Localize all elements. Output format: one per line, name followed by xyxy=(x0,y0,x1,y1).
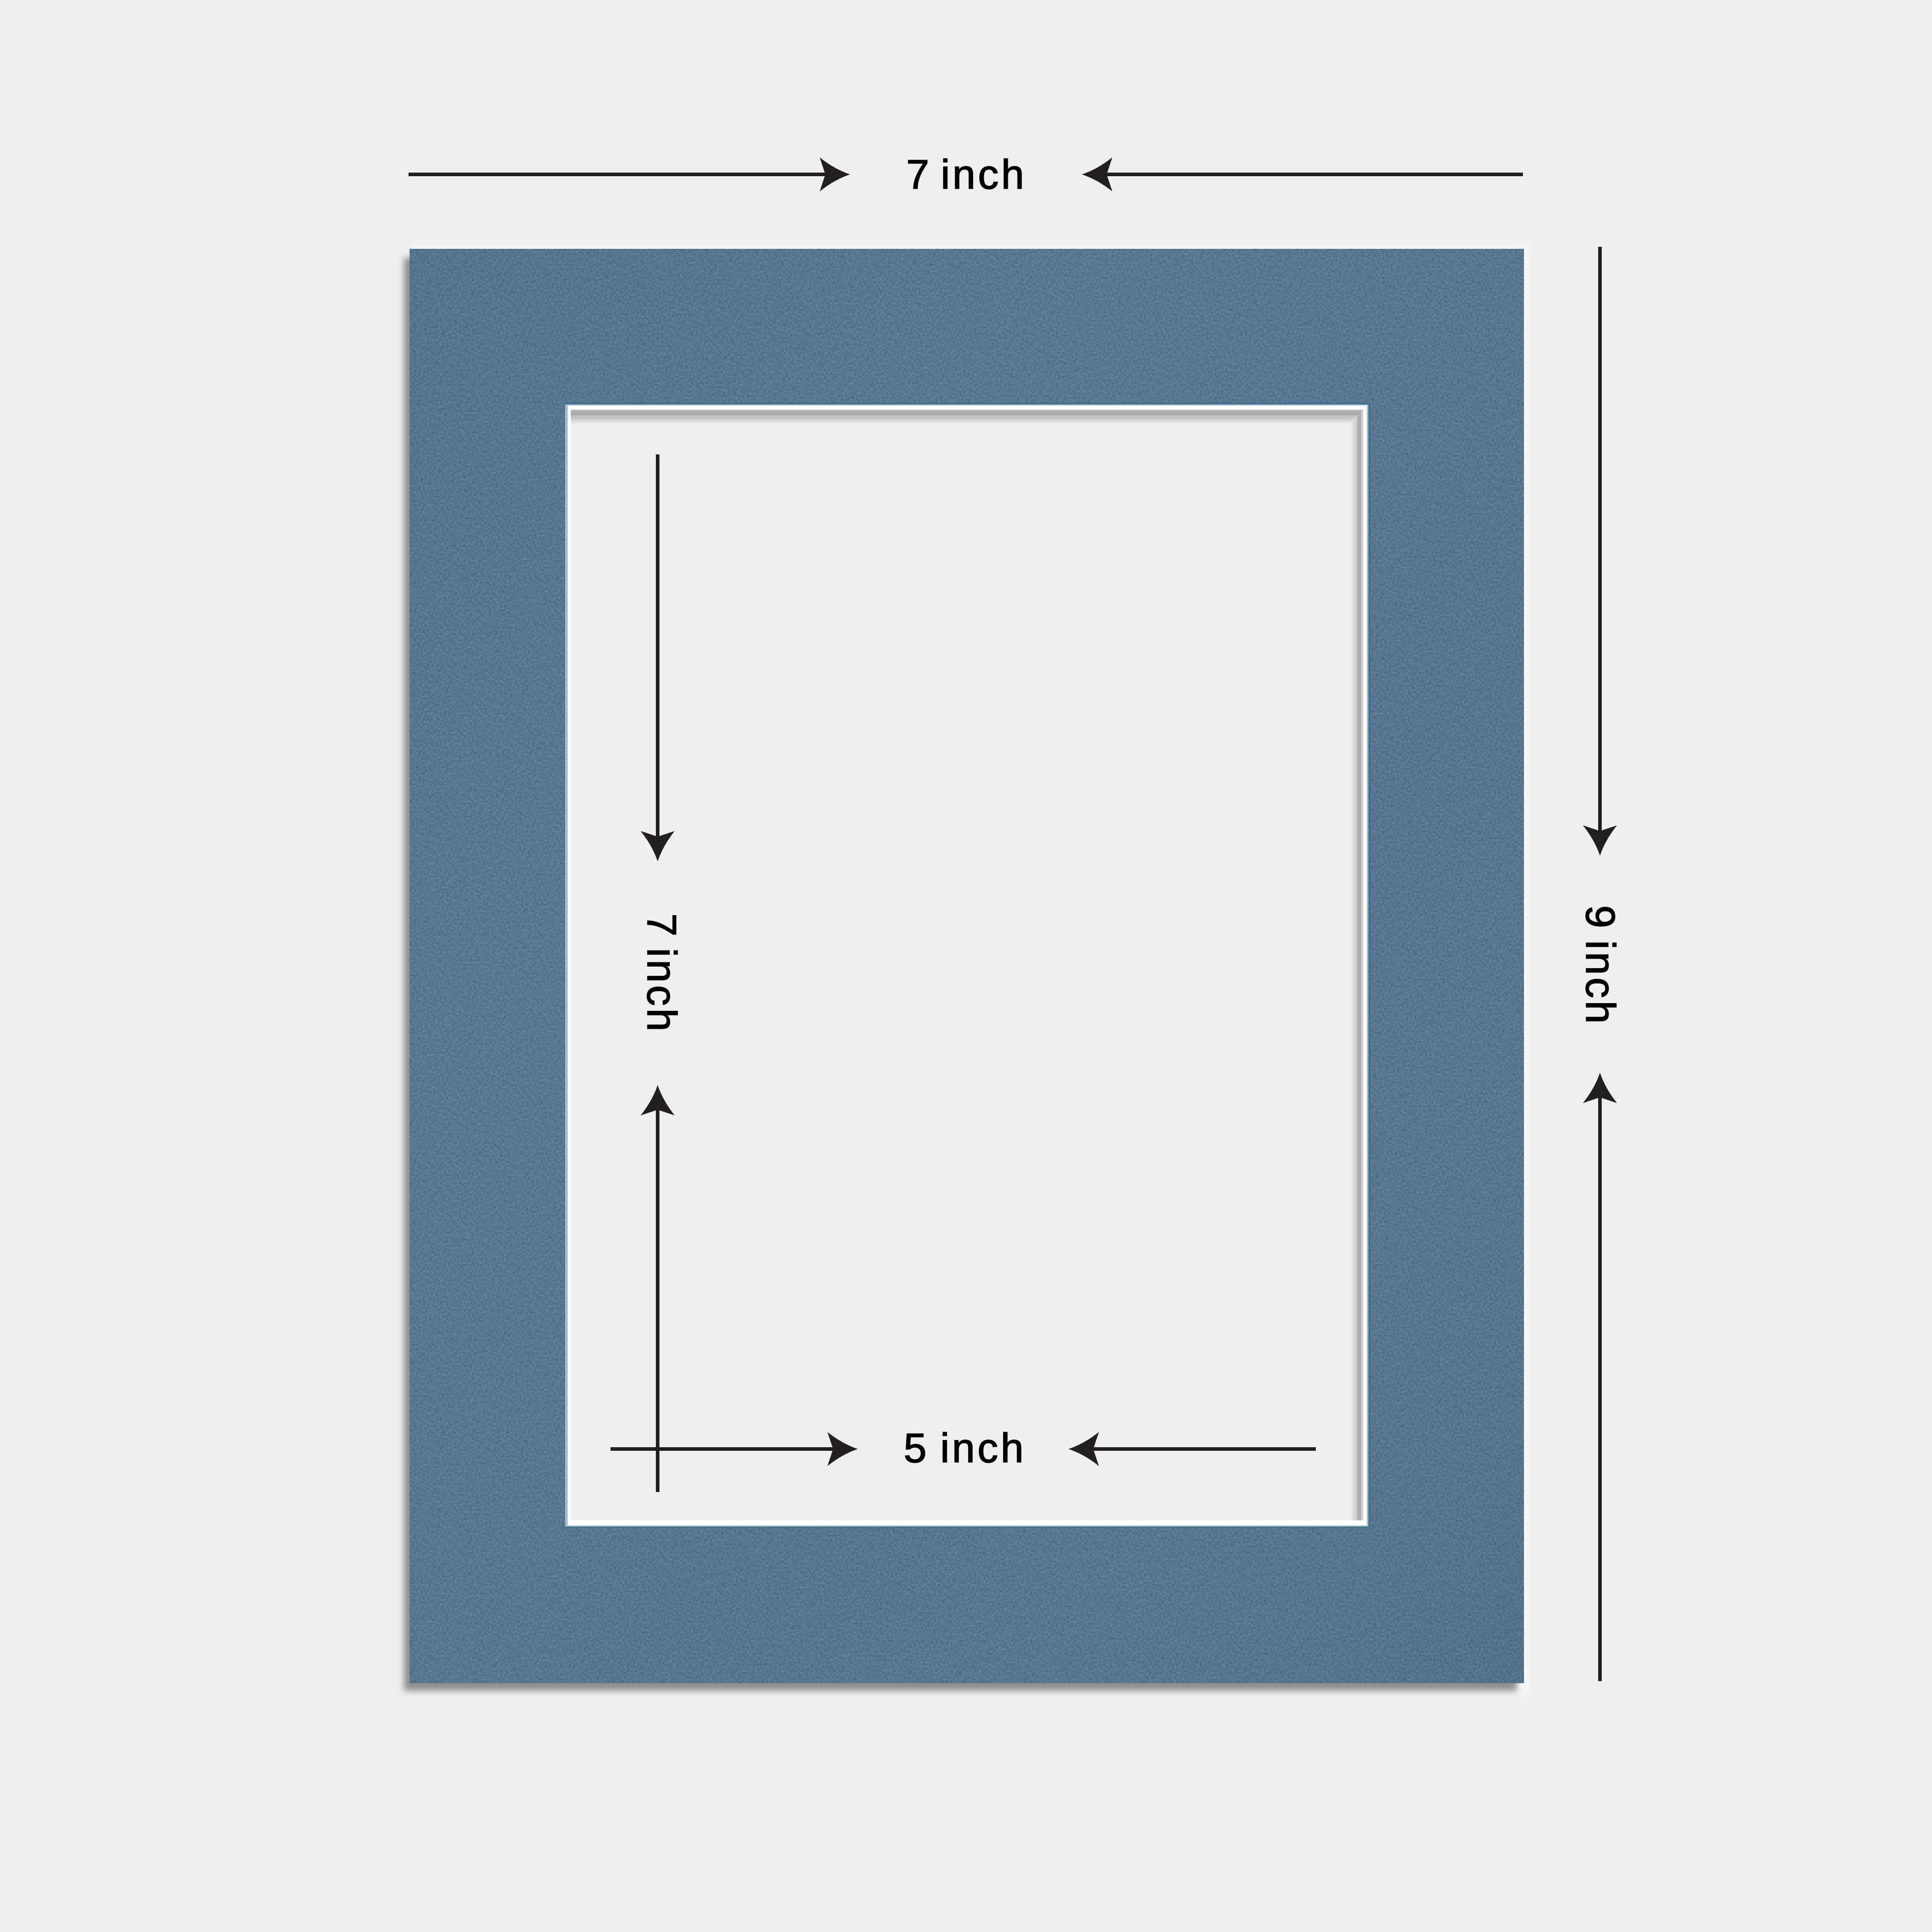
label: window height: inch xyxy=(639,948,685,1034)
window opening xyxy=(571,410,1363,1520)
mat drop shadow xyxy=(404,258,1517,1691)
arrow: window width right xyxy=(1069,1432,1316,1466)
arrow: outer height top xyxy=(1583,247,1617,856)
label: window height: 7 xyxy=(639,913,685,937)
label: window width: inch xyxy=(940,1425,1026,1471)
window bevel light edge xyxy=(565,404,1368,1527)
arrow: outer height bottom xyxy=(1583,1073,1617,1681)
arrow: window width left xyxy=(611,1432,858,1466)
arrow: window height top xyxy=(641,454,675,861)
label: outer height: inch xyxy=(1578,940,1623,1026)
label: outer height: 9 xyxy=(1578,905,1623,928)
arrow: window height bottom xyxy=(641,1085,675,1492)
mat light halo xyxy=(412,244,1529,1692)
label: outer width: inch xyxy=(941,151,1027,197)
window cut edge xyxy=(565,403,1370,1528)
panel: blue mat board with window xyxy=(404,244,1529,1692)
window white bevel xyxy=(568,405,1367,1526)
label: outer width: 7 xyxy=(906,151,929,197)
mat board surface xyxy=(410,249,1524,1683)
arrow: outer width left xyxy=(409,158,850,192)
label: window width: 5 xyxy=(904,1425,926,1471)
window inner shadow right xyxy=(1348,410,1363,1520)
window inner shadow top xyxy=(571,410,1363,424)
arrow: outer width right xyxy=(1082,158,1523,192)
